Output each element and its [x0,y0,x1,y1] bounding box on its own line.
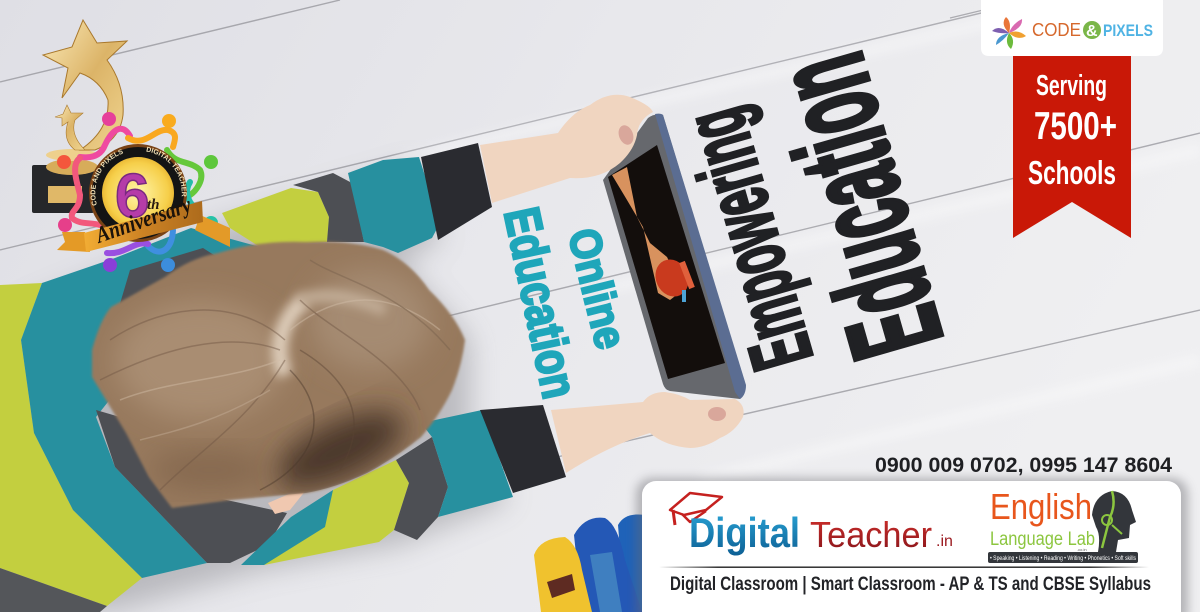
medallion: CODE AND PIXELS [90,149,123,206]
logo: English Language Lab [988,486,1138,563]
logo wordmark: & [1086,23,1098,40]
badge: trophy and 6th anniversary [32,19,230,272]
logo: Digital Teacher: Teacher [810,514,932,555]
logo: English Language Lab: English [990,486,1092,527]
ribbon: serving 7500+ schools: 7500+ [1034,105,1117,148]
ribbon: serving 7500+ schools: Serving [1036,70,1107,102]
child: upper arm and hand [421,95,653,240]
child: head of hair [92,242,465,514]
logo wordmark: CODE [1032,20,1081,40]
medallion: 6 [115,162,149,231]
tablet [603,114,746,399]
phone numbers: 0900 009 0702, 0995 147 8604 [875,454,1172,477]
ribbon: serving 7500+ schools: Schools [1028,154,1116,191]
headline: Online Education: Education [493,203,588,403]
child: soft shadow [0,165,510,612]
logo: English Language Lab: • Speaking • Listening • Reading • Writing • Phonetics • Soft skills [990,556,1136,562]
anniversary ribbon: Anniversary [91,192,195,248]
headline: Online Education [493,203,635,403]
ribbon: serving 7500+ schools [1013,56,1131,238]
logo: English Language Lab: Language Lab [990,529,1095,550]
icon: graduation cap [670,493,722,525]
toy cars [534,514,645,612]
child: shirt and sleeves [0,157,513,612]
swirl figures [57,112,218,272]
icon: head with headset [1092,491,1136,552]
child: lower arm and hand [480,392,744,493]
card: partner logos and slogan [636,478,1188,612]
tablet screen with anatomy image [608,145,725,379]
medallion: DIGITAL TEACHER [146,146,187,196]
anniversary ribbon [57,192,230,252]
trophy [32,20,127,213]
headline: Online Education: Online [558,224,635,354]
logo: Digital Teacher [670,493,953,556]
logo: Digital Teacher: Digital [689,509,800,556]
medallion: th [147,197,160,213]
icon: pinwheel [992,17,1026,49]
logo wordmark: PIXELS [1103,21,1153,40]
logo: English Language Lab: .co.in [1077,547,1087,552]
logo: Digital Teacher: .in [936,533,953,550]
logo wordmark [1032,20,1153,40]
logo card: Code & Pixels [981,0,1163,56]
medallion [89,144,187,242]
